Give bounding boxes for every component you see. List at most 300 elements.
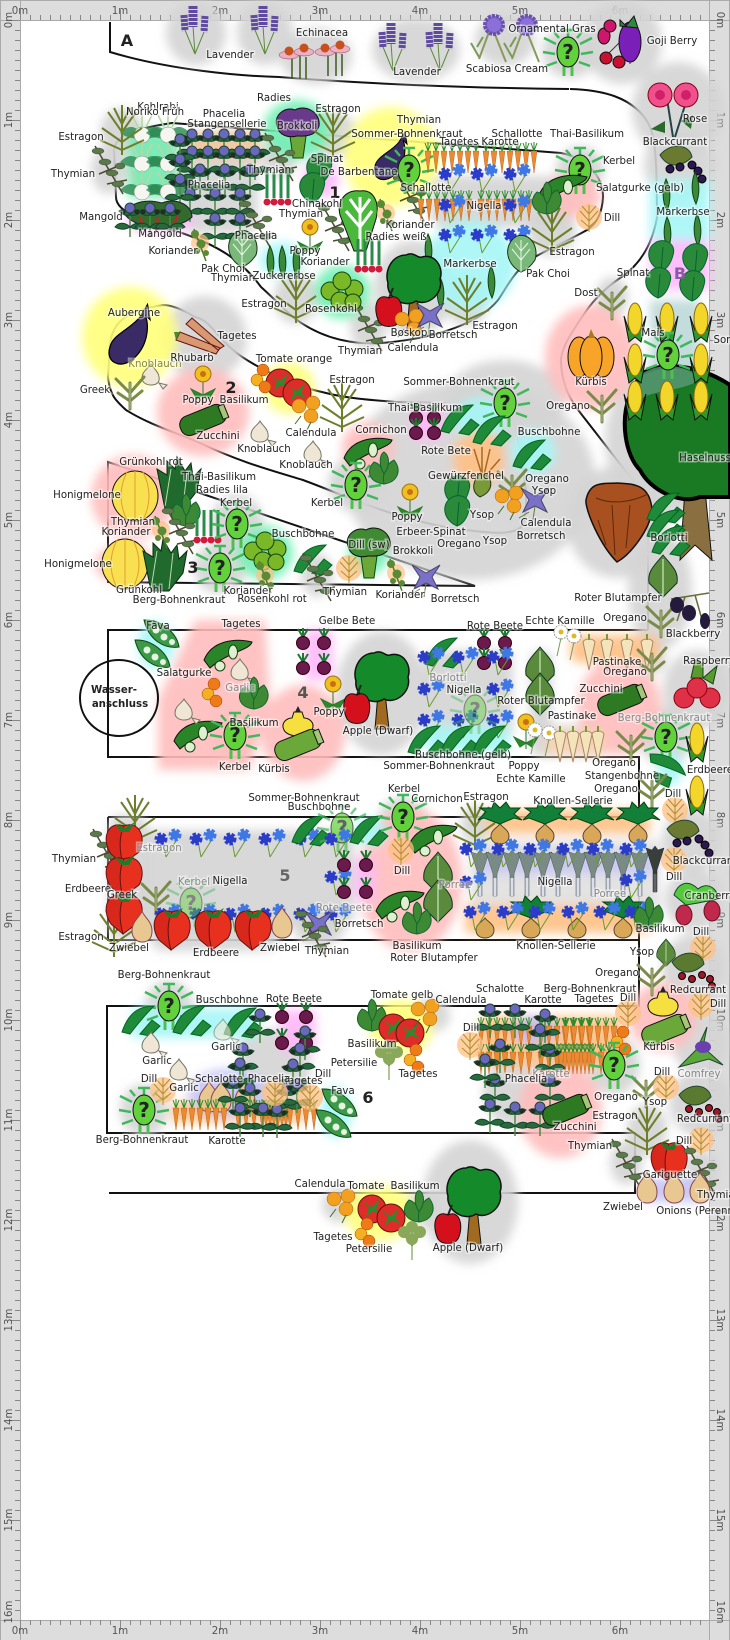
ruler frame: 7m [714,712,725,728]
labels: right border: Gariguette [643,1170,697,1181]
labels: right border: Redcurrant [670,985,726,996]
labels: bed 6: Tagetes [397,1069,438,1080]
labels: bed 2: Kerbel [311,498,343,509]
labels: bed 1: Rosenkohl [305,304,357,315]
labels: bed 2: Calendula [521,518,571,529]
labels: bed 1: Thymian [278,209,323,220]
ruler frame: 2m [714,212,725,228]
labels: bottom border: Tagetes [312,1232,353,1243]
labels: right border: Oregano [603,613,647,624]
labels: bed 1 [50,93,684,357]
labels: bed 1: Phacelia [203,109,245,120]
labels: top row: Echinacea [296,28,348,39]
labels: bed 1: Pak Choi [201,264,245,275]
labels: top row: Ornamental Gras [508,24,596,35]
labels: bed 1: Kerbel [603,156,635,167]
labels: right border: Borlotti [650,533,688,544]
labels: bed 6: Zucchini [553,1122,597,1133]
labels: bed 1: Kohlrabi [137,102,179,113]
labels: bed 6: Tagetes [573,994,614,1005]
labels: right border: Pastinake [593,657,641,668]
labels: bed 2: Knoblauch [128,359,182,370]
labels: bed 2: Ysop [469,510,494,521]
bed markers: 2 [225,378,237,397]
labels: bed 2: Calendula [286,428,336,439]
ruler frame: 0m [714,12,725,28]
ruler frame: 1m [4,112,15,128]
ruler frame: 6m [714,612,725,628]
labels: bed 1: Calendula [388,343,438,354]
labels: bed 3: Thymian [322,587,367,598]
ruler frame: 5m [714,512,725,528]
labels: bed 3: Berg-Bohnenkraut [133,595,225,606]
labels: bed 4: Basilikum [230,718,279,729]
labels: bed 4: Salatgurke [157,668,211,679]
labels: bed 5: Estragon [463,792,509,803]
labels: bed 1: Nigella [466,201,502,212]
ruler frame: 11m [4,1108,15,1131]
labels: bed 2: Ysop [531,486,556,497]
labels: right border: Zucchini [579,684,623,695]
labels: bed 5: Roter Blutampfer [390,953,479,964]
labels: bed 1: Thymian [50,169,95,180]
icons: perennial top row [184,6,641,79]
labels: top row: Goji Berry [647,36,697,47]
ruler frame: 2m [4,212,15,228]
labels: bed 5: Erdbeere [193,948,239,959]
labels: bottom border: Apple (Dwarf) [433,1243,503,1254]
labels: bed 6: Dill [315,1069,331,1080]
icons: bed 2 [109,304,551,526]
labels: bed 1: Radies [257,93,291,104]
labels: bed 1: Phacelia [235,231,277,242]
labels: bottom border [295,1179,503,1255]
ruler frame: 3m [4,312,15,328]
ruler frame: 4m [412,1626,428,1637]
labels: bed 3: Brokkoli [393,546,433,557]
labels: right border: Haselnuss [679,453,730,464]
labels: right border: Dill [693,927,709,938]
bed markers: 1 [329,183,341,202]
labels: bed 1: Thymian [246,165,291,176]
labels: right border: Ysop [629,947,654,958]
labels: bed 1: Tagetes [438,137,479,148]
labels: bottom border: Petersilie [346,1244,392,1255]
ruler frame: 12m [4,1208,15,1231]
labels: bed 2: Oregano [437,539,481,550]
icons: bed 6 [119,983,639,1138]
labels: right border: Spinat [617,268,649,279]
ruler frame: 4m [4,412,15,428]
labels: bed 1: Koriander [385,220,435,231]
labels: bed 1: Boskop [391,328,427,339]
ruler frame: 11m [714,1109,725,1132]
labels: bed 5: Sommer-Bohnenkraut [248,793,360,804]
labels: right border: Echte Kamille [525,616,595,627]
labels: bed 6: Rote Beete [266,994,322,1005]
labels: right border: Basilikum [636,924,685,935]
labels: bed 1: Radies weiß [365,232,427,243]
ruler frame: 16m [714,1601,725,1624]
labels: bed 4: Poppy [314,707,344,718]
labels: bed 4: Echte Kamille [496,774,566,785]
labels: bed 1: Thai-Basilikum [549,129,624,140]
labels: bed 5: Nigella [212,876,248,887]
labels: bed 1: Stangensellerie [187,119,267,130]
labels: bed 6: Dill [463,1023,479,1034]
ruler frame: 6m [612,6,628,17]
labels: bed 2: Aubergine [108,308,160,319]
labels: bed 4: Poppy [509,761,539,772]
labels: bed 4: Gelbe Bete [319,616,375,627]
labels: bed 5: Porree [594,889,626,900]
labels: right border: Oregano [546,401,590,412]
labels: right border: Rose [683,114,707,125]
labels: bed 4: Apple (Dwarf) [343,726,413,737]
ruler frame: 5m [4,512,15,528]
labels: bed 5: Zwiebel [260,943,300,954]
labels: bed 1: De Barbentane [321,167,397,178]
ruler frame: 0m [12,6,28,17]
labels: bed 6: Karotte [532,1069,570,1080]
labels: bed 2: Borretsch [517,531,565,542]
labels: bed 6: Berg-Bohnenkraut [118,970,210,981]
labels: bed 1: Estragon [241,299,287,310]
labels: bed 6: Tagetes [282,1076,323,1087]
bed markers: 5 [279,866,291,885]
labels: right border: Estragon [592,1111,638,1122]
labels: bed 6: Phacelia [505,1074,547,1085]
ruler frame: 6m [4,612,15,628]
ruler frame: 8m [4,812,15,828]
bed markers: B [674,264,686,283]
ruler frame: 6m [612,1626,628,1637]
labels: bed 6: Schalotte [195,1074,243,1085]
labels: bed 2: Buschbohne [518,427,580,438]
labels: bed 6: Berg-Bohnenkraut [544,984,636,995]
labels: right border: Kürbis [643,1042,675,1053]
labels: bed 5: Zwiebel [109,943,149,954]
labels: top row: Lavender [393,67,442,78]
labels: bed 3: Buschbohne [272,529,334,540]
ruler frame: 15m [714,1509,725,1532]
labels: bed 6: Garlic [169,1083,199,1094]
ruler frame: 2m [212,1626,228,1637]
labels: right border: Ysop [642,1097,667,1108]
labels: bed 5: Greek [107,890,137,901]
labels: bed 2: Sommer-Bohnenkraut [403,377,515,388]
ruler frame: 1m [112,1626,128,1637]
labels: bed 6: Petersilie [331,1058,377,1069]
labels: bed 1: Spinat [311,154,343,165]
labels: right border: Dill [676,1136,692,1147]
icons: bed 1 [92,105,605,351]
hazelnut [586,483,652,562]
labels: bed 5: Rote Beete [316,903,372,914]
ruler frame: 16m [4,1600,15,1623]
ruler frame: 4m [714,412,725,428]
labels: bed 4: Stangenbohne [585,771,659,782]
labels: bed 5: Kerbel [388,784,420,795]
ruler frame: 9m [4,912,15,928]
labels: bed 2: Oregano [525,474,569,485]
labels: top row [206,24,697,78]
labels: bed 2: Estragon [329,375,375,386]
labels: bed 3: Koriander [101,527,151,538]
bed markers: A [121,31,134,50]
labels: bed 3: Rosenkohl rot [237,594,307,605]
ruler frame: 14m [4,1408,15,1431]
labels: bed 1: Mangold [79,212,123,223]
labels: bed 3: Honigmelone [44,559,112,570]
ruler frame: 8m [714,812,725,828]
labels: bed 2: Knoblauch [279,460,333,471]
labels: bed 1: Thymian [337,346,382,357]
labels: right border: Zwiebel [603,1202,643,1213]
labels: bed 5: Cornichon [411,794,463,805]
water connection circle: Wasser- [91,685,137,696]
labels: bed 2: Thai-Basilikum [387,403,462,414]
labels: bed 1: Koriander [148,246,198,257]
labels: right border: Blackberry [666,629,720,640]
labels: bed 6: Garlic [142,1056,172,1067]
labels: bed 6: Dill [620,993,636,1004]
labels: bed 5 [51,784,626,964]
labels: bed 4: Pastinake [548,711,596,722]
labels: top row: Scabiosa Cream [466,64,548,75]
ruler frame: 14m [714,1409,725,1432]
labels: bed 5: Knollen-Sellerie [516,941,596,952]
ruler frame: 3m [714,312,725,328]
labels: bed 2: Tagetes [216,331,257,342]
labels: bed 5: Buschbohne [288,802,350,813]
labels: bed 1: Karotte [481,137,519,148]
labels: bed 6 [96,970,636,1147]
labels: right border: Dill [710,999,726,1010]
labels: bed 4: Fava [146,621,170,632]
labels: bed 5: Basilikum [392,941,442,952]
labels: bed 1: Estragon [58,132,104,143]
labels: bed 1: Brokkoli [277,121,317,132]
labels: bed 4: Roter Blutampfer [497,696,586,707]
labels: bed 2: Tomate orange [255,354,332,365]
labels: right border: Oregano [595,968,639,979]
ruler frame: 7m [4,712,15,728]
icons: bottom border [327,1167,501,1260]
ruler frame: 5m [512,6,528,17]
labels: bed 4: Tagetes [220,619,261,630]
ruler frame: 10m [4,1008,15,1031]
labels: bed 3: Koriander [375,590,425,601]
labels: bed 5: Thymian [51,854,96,865]
labels: bed 2: Ysop [482,536,507,547]
ruler frame: 12m [714,1209,725,1232]
labels: bed 5: Porree [439,880,471,891]
labels: bed 1: Estragon [549,247,595,258]
labels: bed 4: Buschbohne (gelb) [415,750,511,761]
labels: bed 1: Koriander [300,257,350,268]
labels: top row: Lavender [206,50,255,61]
labels: bed 5: Nigella [537,877,573,888]
labels: bed 6: Schalotte [476,984,524,995]
labels: bed 4: Kerbel [219,762,251,773]
labels: bed 3: Borretsch [431,594,479,605]
labels: bed 4: Oregano [594,784,638,795]
labels: bed 2: Erbeer-Spinat [396,527,466,538]
labels: bed 4: Garlic [225,683,255,694]
labels: bottom border: Basilikum [390,1181,440,1192]
icons: bed 3 [102,457,440,601]
labels: bed 2: Knoblauch [237,444,291,455]
ruler frame: 13m [4,1308,15,1331]
bed markers: 6 [362,1088,374,1107]
labels: bed 4: Kürbis [258,764,290,775]
labels: bed 2 [80,308,580,550]
labels: bed 4: Rote Beete [467,621,523,632]
labels: right border: Berg-Bohnenkraut [618,713,710,724]
labels: bed 5: Kerbel [178,877,210,888]
labels: bottom border: Tomate [346,1181,385,1192]
labels: bed 6: Buschbohne [196,995,258,1006]
bed markers [121,31,686,1107]
labels: bed 1: Poppy [290,246,320,257]
labels: right border: Dill [666,872,682,883]
labels: bed 1: Estragon [315,104,361,115]
labels: bed 3: Dill (sw) [348,540,390,551]
labels: right border: Oregano [603,667,647,678]
labels: bed 1: Pak Choi [526,269,570,280]
labels: bed 2: Poppy [392,512,422,523]
bed outlines [107,22,657,1193]
labels: bed 6: Garlic [211,1042,241,1053]
ruler frame: 4m [412,6,428,17]
labels: bed 6: Karotte [208,1136,246,1147]
labels: bed 1: Mangold [138,229,182,240]
colored planting halos [82,0,730,1264]
labels: bed 1: Salatgurke (gelb) [596,183,684,194]
labels: bed 6: Phacelia [248,1074,290,1085]
labels: bed 4 [146,616,659,795]
labels: right border: Roter Blutampfer [574,593,663,604]
labels: bed 5: Knollen-Sellerie [533,796,613,807]
ruler frame: 5m [512,1626,528,1637]
bed markers: 3 [187,558,199,577]
ruler frame: 0m [4,12,15,28]
labels: bed 1: Schallotte [401,183,451,194]
labels: bed 6: Dill [141,1074,157,1085]
labels: bed 6: Berg-Bohnenkraut [96,1135,188,1146]
labels: right border: Blackcurrant [643,137,707,148]
ruler frame: 1m [714,112,725,128]
labels: bed 1: Borretsch [429,330,477,341]
labels: bed 6: Calendula [436,995,486,1006]
labels: bed 3: Koriander [223,586,273,597]
labels: bed 6: Basilikum [348,1039,397,1050]
bed markers: 4 [297,683,309,702]
labels: bed 1: Dill [604,213,620,224]
water connection circle: anschluss [92,699,148,710]
labels: bed 6: Karotte [524,995,562,1006]
labels: bed 2: Cornichon [355,425,407,436]
labels: bed 2: Rhubarb [170,353,214,364]
labels: bed 1: Zuckererbse [252,271,316,282]
labels: bed 4: Nigella [446,685,482,696]
big hazelnut tree [625,366,730,560]
ruler frame: 0m [12,1626,28,1637]
labels: bed 3: Grünkohl rot [119,457,183,468]
labels: bed 1: Markerbse [443,259,497,270]
labels: bed 4: Borlotti [429,673,467,684]
labels: bed 3 [44,457,479,606]
labels: bed 1: Thymian [210,273,255,284]
ruler frame: 13m [714,1309,725,1332]
labels: bed 1: Estragon [472,321,518,332]
labels: bed 5: Thymian [304,946,349,957]
ruler frame: 3m [312,1626,328,1637]
trees drawn large [586,366,730,562]
labels: bed 2: Basilikum [220,395,269,406]
labels: bed 6: Tomate gelb [370,990,433,1001]
labels: bed 1: Sommer-Bohnenkraut [351,129,463,140]
labels: right border [525,114,730,1217]
labels: right border: Thymian [567,1141,612,1152]
labels: bed 3: Honigmelone [53,490,121,501]
labels: right border: Dill [665,789,681,800]
labels: bed 2: Poppy [183,395,213,406]
labels: right border: Dost [574,288,598,299]
labels: bed 5: Borretsch [335,919,383,930]
icons: right-hand border [568,83,723,1203]
labels: bed 1: Phacelia [188,180,230,191]
labels: bed 5: Estragon [58,932,104,943]
labels: bed 3: Radies lila [196,485,248,496]
labels: bed 6: Fava [331,1086,355,1097]
labels: bed 5: Erdbeere [65,884,111,895]
labels: bed 3: Kerbel [220,498,252,509]
labels: right border: Dill [654,1067,670,1078]
labels: right border: Mais [641,328,665,339]
ruler frame: 2m [212,6,228,17]
labels: bed 2: Greek [80,385,110,396]
ruler frame: 15m [4,1508,15,1531]
labels: bed 1: Chinakohl [292,199,342,210]
icons: bed 5 [90,794,664,957]
labels: bed 4: Oregano [592,758,636,769]
labels: bed 3: Grünkohl [116,585,162,596]
water connection circle [80,660,158,736]
labels: bed 3: Thymian [110,517,155,528]
labels: bed 2: Gewürzfenchel [428,471,504,482]
labels: bottom border: Calendula [295,1179,345,1190]
icons: bed 4 [135,620,666,763]
labels: bed 5: Estragon [136,843,182,854]
labels: bed 3: Thai-Basilikum [181,472,256,483]
labels: right border: Oregano [594,1092,638,1103]
ruler frame: 1m [112,6,128,17]
labels: bed 2: Zucchini [196,431,240,442]
labels: bed 1: Noriko Früh [126,107,184,118]
labels: bed 1: Schallotte [492,129,542,140]
labels: right border: Comfrey [677,1069,721,1080]
labels: right border: Markerbse [656,207,710,218]
ruler frame: 9m [714,912,725,928]
labels: bed 1: Thymian [396,115,441,126]
ruler frame: 3m [312,6,328,17]
ruler frame: 10m [714,1009,725,1032]
labels: bed 4: Sommer-Bohnenkraut [383,761,495,772]
labels: bed 2: Rote Bete [421,446,471,457]
labels: right border: Kürbis [575,377,607,388]
